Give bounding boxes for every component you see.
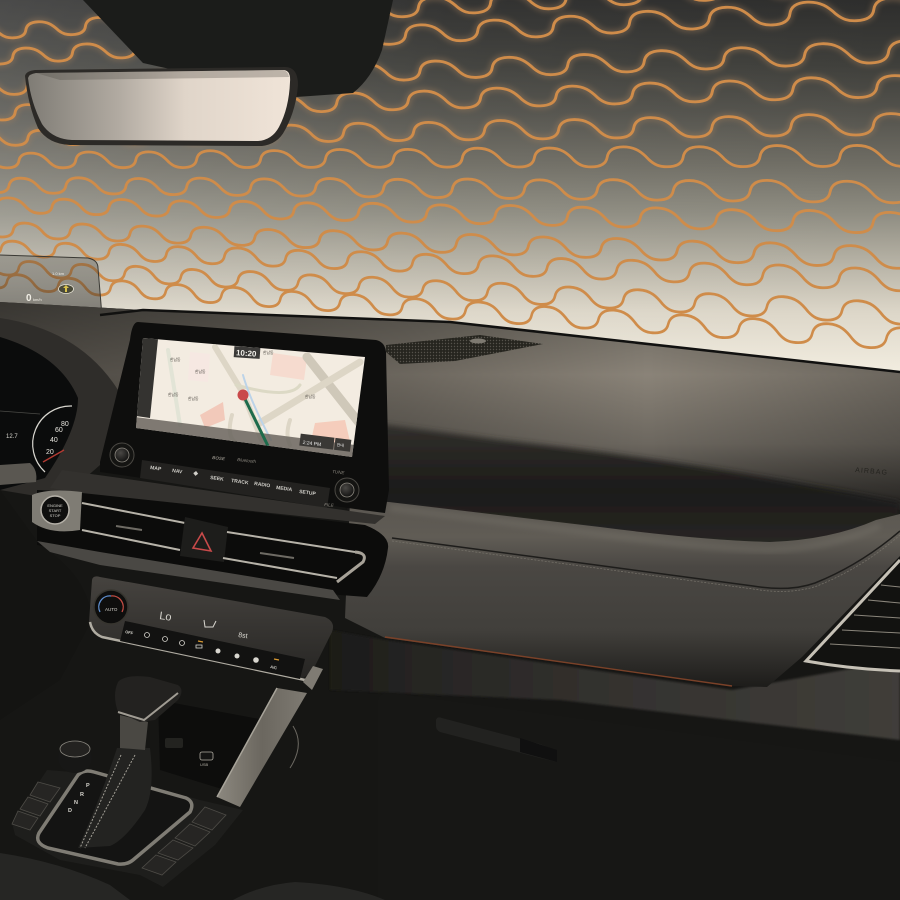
shift position labels: R	[80, 792, 84, 798]
airbag label: AIRBAG	[855, 467, 888, 477]
start button housing: ENGINE	[47, 503, 63, 508]
navigation map screen	[136, 338, 365, 457]
HUD arrow badge	[58, 284, 74, 294]
windshield base line	[100, 310, 900, 372]
brand labels: FILE	[324, 502, 335, 508]
instrument cluster: 12.7	[6, 434, 18, 440]
climate control panel	[89, 576, 333, 680]
route line	[243, 395, 268, 446]
turn signal stalk	[0, 463, 36, 485]
shift boot	[78, 748, 152, 848]
dashboard top surface	[0, 302, 900, 510]
pad stitching	[392, 531, 900, 591]
shift position labels: D	[68, 808, 72, 814]
instrument cluster: 80	[61, 421, 69, 428]
instrument cluster: 60	[55, 427, 63, 434]
silver console pillar	[217, 666, 323, 807]
volume knob	[110, 443, 134, 467]
time badge	[234, 346, 260, 359]
gear stem	[120, 715, 148, 750]
seat edges	[0, 853, 385, 900]
gear knob	[115, 676, 182, 722]
right console buttons	[142, 807, 226, 875]
head-up display glass: 1.0 km	[52, 271, 65, 276]
start button housing	[32, 491, 82, 531]
center console left dark panel	[0, 490, 92, 720]
instrument cluster: 40	[50, 437, 58, 444]
brand labels: TUNE	[332, 469, 346, 475]
hardware button row: SETUP	[299, 489, 317, 497]
start button housing: STOP	[50, 513, 61, 518]
map bottom bar	[136, 417, 354, 457]
map labels: 한남동	[305, 394, 316, 399]
arrival info: 안내	[336, 441, 345, 448]
infotainment unit	[100, 322, 389, 513]
hardware button row: MAP	[150, 465, 162, 473]
seat icon	[204, 620, 216, 627]
brand labels: BOSE	[212, 455, 226, 461]
shifter console plate	[12, 770, 243, 887]
map labels: 한남동	[263, 350, 274, 355]
right air vent	[806, 557, 900, 672]
fan display: 8st	[238, 632, 248, 640]
lower textured band	[330, 630, 900, 740]
map labels: 한남동	[195, 369, 206, 374]
silver trim	[90, 622, 305, 680]
map left button column	[136, 338, 158, 418]
current position marker	[238, 390, 248, 400]
dashboard base	[0, 302, 900, 900]
head-up display glass	[0, 255, 102, 316]
rear view mirror	[25, 67, 298, 146]
passenger crash pad	[345, 500, 900, 687]
arrival info: 2:24 PM	[302, 440, 321, 448]
left console buttons	[12, 782, 60, 830]
shift position labels	[68, 783, 90, 814]
brand labels: Bluetooth	[237, 457, 257, 464]
hardware button row: RADIO	[254, 481, 271, 489]
black leather band	[350, 420, 900, 560]
glove box	[378, 693, 900, 900]
shift position labels: N	[74, 800, 78, 806]
climate buttons: OFF	[125, 629, 134, 636]
glove box handle	[436, 717, 557, 762]
time badge: 10:20	[236, 348, 257, 359]
map labels: 한남동	[170, 357, 181, 362]
heating wire pattern	[0, 0, 900, 353]
sun visor and mirror mount	[83, 0, 393, 97]
hazard switch	[180, 517, 228, 562]
climate buttons: A/C	[270, 664, 278, 670]
windshield background	[0, 0, 900, 380]
climate buttons	[120, 621, 305, 679]
trim strip below vents	[37, 541, 340, 600]
shift surround trim	[38, 771, 192, 864]
temperature display: Lo	[159, 610, 172, 624]
speaker grille	[386, 335, 543, 364]
map labels	[168, 350, 316, 401]
USB niche: USB	[200, 762, 209, 767]
drive mode dial	[58, 741, 92, 773]
brand labels	[212, 455, 346, 508]
USB niche	[158, 700, 275, 790]
grille sensor	[470, 338, 486, 344]
head-up display glass: km/h	[33, 297, 42, 302]
copper trim line	[385, 637, 732, 686]
hardware button row: TRACK	[231, 478, 249, 486]
upper trim strip	[50, 470, 385, 524]
heating wire glow, upper windshield	[0, 0, 900, 147]
climate knob	[94, 590, 128, 624]
cluster hood	[0, 318, 118, 500]
left vent slats	[82, 503, 185, 550]
shift position labels: P	[86, 783, 90, 789]
start button housing: START	[49, 508, 62, 513]
tune knob	[335, 478, 359, 502]
map labels: 한남동	[168, 392, 179, 397]
hardware button row: MEDIA	[276, 485, 293, 493]
side cable bracket	[290, 726, 298, 768]
center vent bezel	[32, 470, 388, 600]
pad top highlight	[390, 508, 880, 550]
hardware button row: ◆	[193, 471, 199, 478]
map labels: 한남동	[188, 396, 199, 401]
right vent slats	[223, 532, 364, 582]
hardware button row: SEEK	[210, 475, 224, 483]
climate knob: AUTO	[105, 607, 118, 612]
head-up display glass: 0	[26, 293, 32, 304]
arrival info	[299, 434, 351, 452]
hardware button row	[140, 460, 330, 508]
instrument cluster: 20	[46, 449, 54, 456]
instrument cluster	[0, 337, 78, 490]
hardware button row: NAV	[172, 468, 183, 475]
